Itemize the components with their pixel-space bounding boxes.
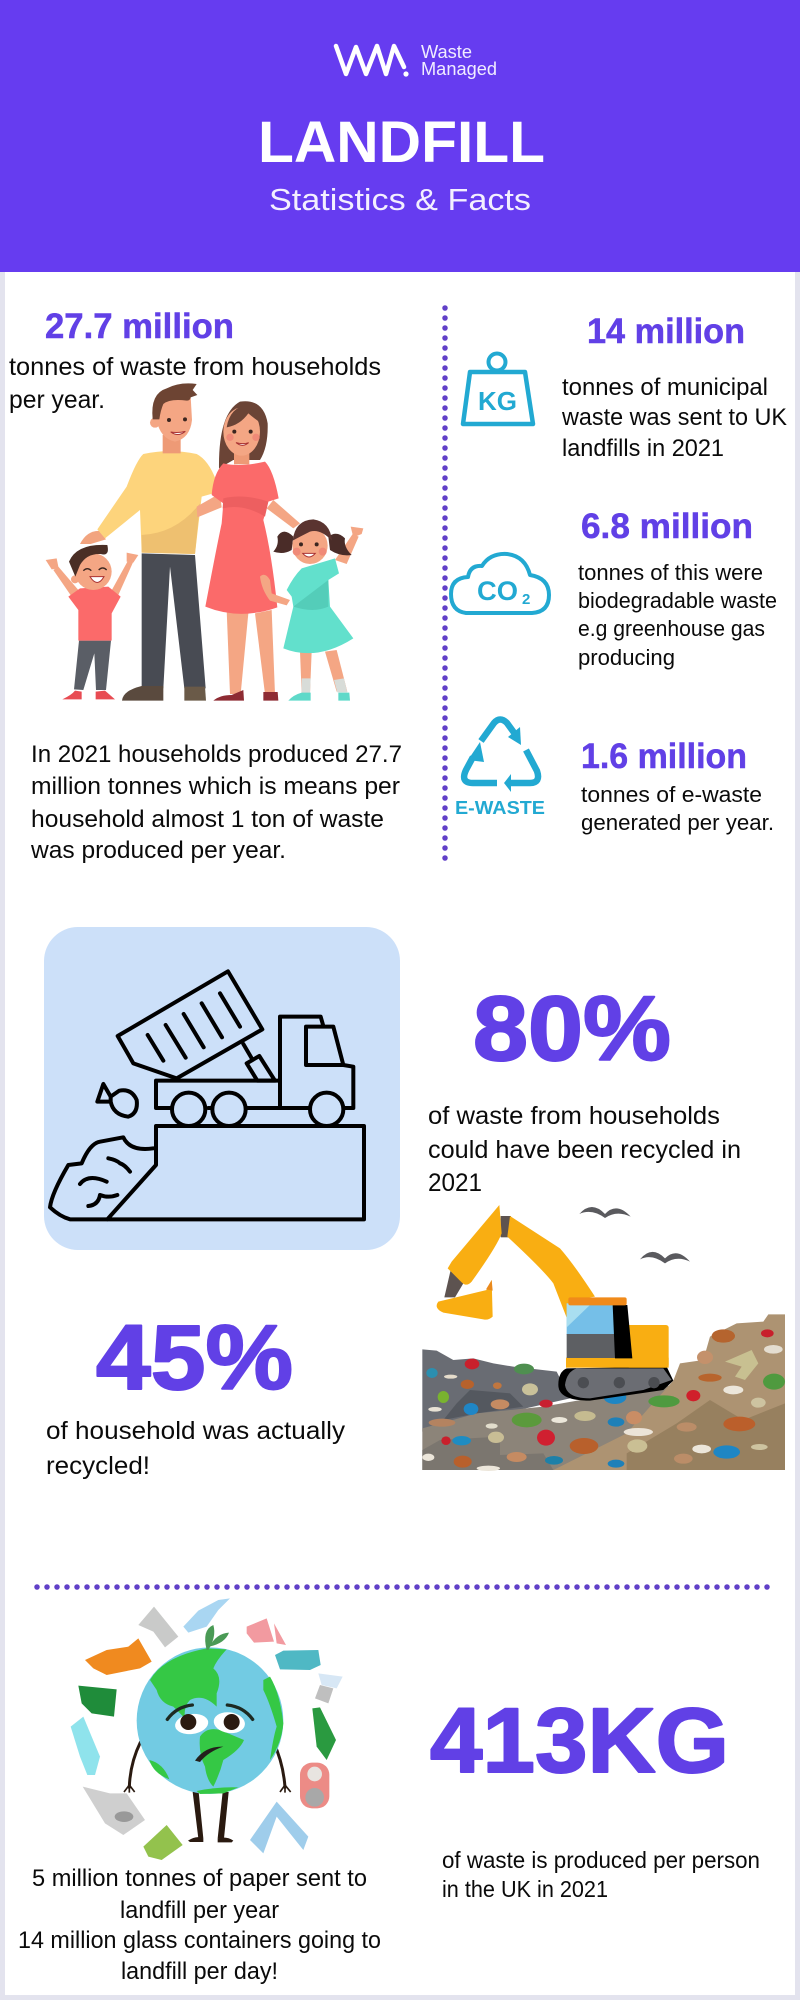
text: e-waste per year	[581, 782, 774, 835]
figure: father	[80, 383, 216, 701]
icon: CO2 cloud	[451, 554, 549, 613]
panel: dump truck illustration	[44, 927, 400, 1250]
text: paper and glass	[18, 1865, 381, 1985]
text: tonnes of waste from households: per year.	[9, 386, 105, 414]
excavator body	[558, 1297, 673, 1401]
text: waste per person: of waste is produced per person	[442, 1847, 760, 1873]
figure: mother	[197, 401, 300, 701]
stat: 14 million: 14 million	[587, 312, 745, 351]
text: waste per person	[442, 1847, 760, 1902]
logo: Waste Managed: Managed	[421, 59, 497, 79]
text: actually recycled	[46, 1417, 346, 1480]
text: e-waste per year: tonnes of e-waste	[581, 782, 762, 807]
text: municipal waste	[561, 374, 787, 462]
logo: Waste Managed: Waste	[421, 42, 472, 62]
earth character	[124, 1625, 291, 1842]
text: tonnes of waste from households	[9, 353, 381, 414]
excavator arm	[437, 1205, 595, 1320]
logo: Waste Managed	[336, 42, 497, 79]
text: actually recycled: recycled!	[46, 1452, 150, 1480]
text: municipal waste: waste was sent to UK	[561, 404, 787, 431]
text: could have been recycled: 2021	[428, 1169, 482, 1197]
text: waste per person: in the UK in 2021	[442, 1876, 608, 1902]
text: household explanation: million tonnes which is means per	[31, 773, 400, 800]
panel: header	[0, 0, 800, 272]
icon: dump truck on landfill	[50, 971, 364, 1219]
illustration: family	[46, 383, 363, 701]
text: paper and glass: 14 million glass containers going to	[18, 1927, 381, 1954]
stat: 80%: 80%	[473, 978, 671, 1080]
figure: girl	[260, 519, 363, 701]
figure: boy	[46, 545, 138, 699]
text: household explanation: was produced per year.	[30, 837, 286, 864]
text: biodegradable waste: producing	[578, 645, 675, 670]
text: tonnes of waste from households: tonnes of waste from households	[9, 353, 381, 381]
icon: kg weight: KG	[478, 386, 517, 416]
stat: 1.6 million: 1.6 million	[581, 737, 747, 776]
rubbish ring	[71, 1598, 343, 1860]
text: paper and glass: landfill per day!	[121, 1958, 278, 1985]
text: actually recycled: of household was actually	[46, 1417, 346, 1445]
birds	[579, 1207, 690, 1263]
icon: kg weight	[463, 354, 533, 424]
text: biodegradable waste: tonnes of this were	[578, 560, 763, 585]
subtitle: Statistics & Facts	[269, 182, 531, 217]
text: household explanation: household almost 1 ton of waste	[31, 806, 384, 833]
stat: 413KG: 413KG	[430, 1690, 729, 1792]
text: could have been recycled: of waste from households	[428, 1102, 720, 1130]
text: municipal waste: landfills in 2021	[562, 435, 724, 462]
text: e-waste per year: generated per year.	[581, 810, 774, 835]
text: household explanation	[30, 741, 402, 864]
text: paper and glass: landfill per year	[120, 1897, 279, 1924]
icon: CO2 cloud: CO	[477, 576, 518, 606]
icon: e-waste recycle	[455, 720, 545, 818]
landfill debris	[422, 1329, 785, 1471]
text: municipal waste: tonnes of municipal	[562, 374, 768, 401]
text: biodegradable waste: biodegradable waste	[578, 588, 777, 613]
title: LANDFILL	[258, 110, 545, 175]
stat: 27.7 million: 27.7 million	[45, 307, 234, 346]
illustration: sad earth with rubbish	[71, 1598, 343, 1860]
illustration: excavator on landfill	[422, 1205, 785, 1471]
icon: e-waste recycle: E-WASTE	[455, 798, 545, 818]
text: could have been recycled: could have been recycled in	[428, 1136, 741, 1164]
text: household explanation: In 2021 households produced 27.7	[31, 741, 402, 768]
stat: 45%: 45%	[96, 1307, 293, 1409]
panel: household waste	[9, 307, 402, 864]
stat: 6.8 million: 6.8 million	[581, 507, 753, 546]
icon: CO2 cloud: 2	[522, 591, 530, 608]
text: biodegradable waste: e.g greenhouse gas	[578, 616, 765, 641]
text: paper and glass: 5 million tonnes of paper sent to	[32, 1865, 367, 1892]
text: biodegradable waste	[578, 560, 777, 670]
panel: national statistics	[451, 312, 787, 835]
landfill ground	[422, 1314, 785, 1470]
text: could have been recycled	[428, 1102, 741, 1197]
